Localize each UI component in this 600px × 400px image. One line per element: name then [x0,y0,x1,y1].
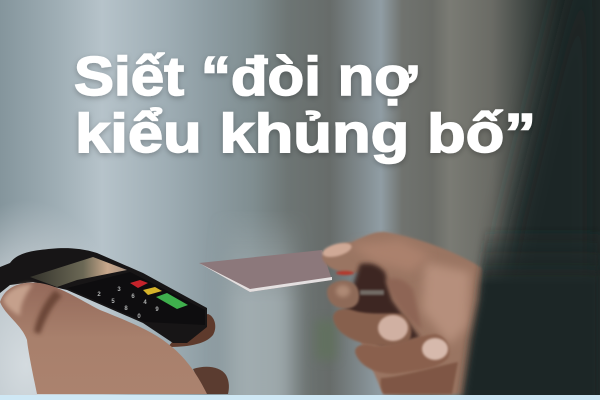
title: Siết “đòi nợ [74,45,418,107]
bottom strip [0,395,600,400]
keypad numbers: 9 [155,307,159,313]
keypad numbers [97,287,159,320]
right hand holding card [321,232,482,394]
card [199,250,332,292]
keypad numbers: 6 [131,294,135,300]
keypad numbers: 3 [117,287,121,293]
keypad numbers: 5 [111,299,115,305]
title: kiểu khủng bố” [75,102,536,164]
title [74,45,536,164]
keypad numbers: 0 [137,314,141,320]
dark foreground shoulder [462,225,600,396]
left hand behind-fingers [168,314,229,394]
keypad numbers: 2 [97,292,101,298]
fingernails [321,240,448,360]
keypad numbers: 8 [124,306,128,312]
keypad numbers: 4 [143,300,147,306]
left hand [0,283,207,394]
payment terminal [0,248,207,343]
buttons [130,280,188,309]
